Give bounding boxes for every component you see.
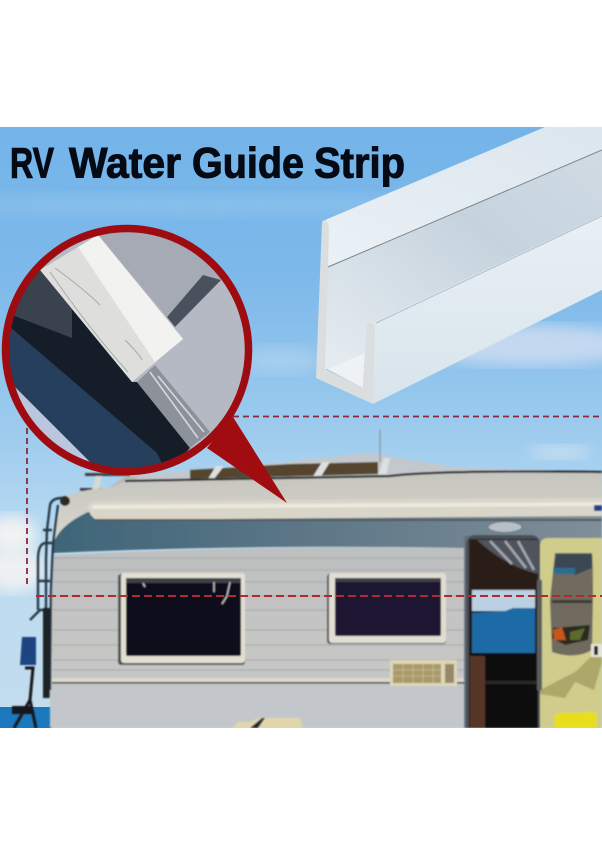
strip upper face xyxy=(325,127,602,268)
strip middle channel xyxy=(322,150,602,371)
sea horizon xyxy=(0,707,52,728)
title: Water xyxy=(69,140,181,188)
roof lamp xyxy=(60,496,70,506)
open yellow door xyxy=(537,538,602,728)
door frame and opening xyxy=(464,535,540,728)
callout: magnified detail lens xyxy=(0,225,287,503)
right window xyxy=(327,573,446,644)
AC vent xyxy=(390,660,457,686)
yellow bucket xyxy=(554,712,597,728)
strip front lip xyxy=(368,215,602,404)
door storage organizer xyxy=(550,553,593,656)
strip end profile xyxy=(316,220,375,404)
left window xyxy=(118,573,245,665)
solar rack on roof xyxy=(80,430,600,494)
grey siding wall xyxy=(50,546,464,684)
strip inner floor xyxy=(327,353,365,388)
photo background: sky xyxy=(0,127,602,728)
porch light xyxy=(488,522,522,532)
title: RV xyxy=(10,140,54,188)
blue tank and tripod xyxy=(12,637,36,728)
roof cap xyxy=(54,472,602,540)
callout pointer xyxy=(207,417,287,503)
bottom utility box xyxy=(232,718,303,728)
title xyxy=(10,140,405,188)
rear ladder xyxy=(30,498,62,690)
guide line over RV xyxy=(36,595,602,597)
RV body xyxy=(12,430,602,728)
lens contents xyxy=(9,232,245,468)
title: Guide xyxy=(192,140,304,188)
awning xyxy=(88,498,602,520)
guide lines: red dashed xyxy=(27,416,602,587)
siding lines xyxy=(53,558,466,670)
blue band under awning xyxy=(53,512,602,553)
lens red ring xyxy=(6,228,248,472)
product: J-shaped water guide strip xyxy=(316,127,602,404)
infographic scene xyxy=(0,127,602,728)
title: Strip xyxy=(314,140,405,188)
